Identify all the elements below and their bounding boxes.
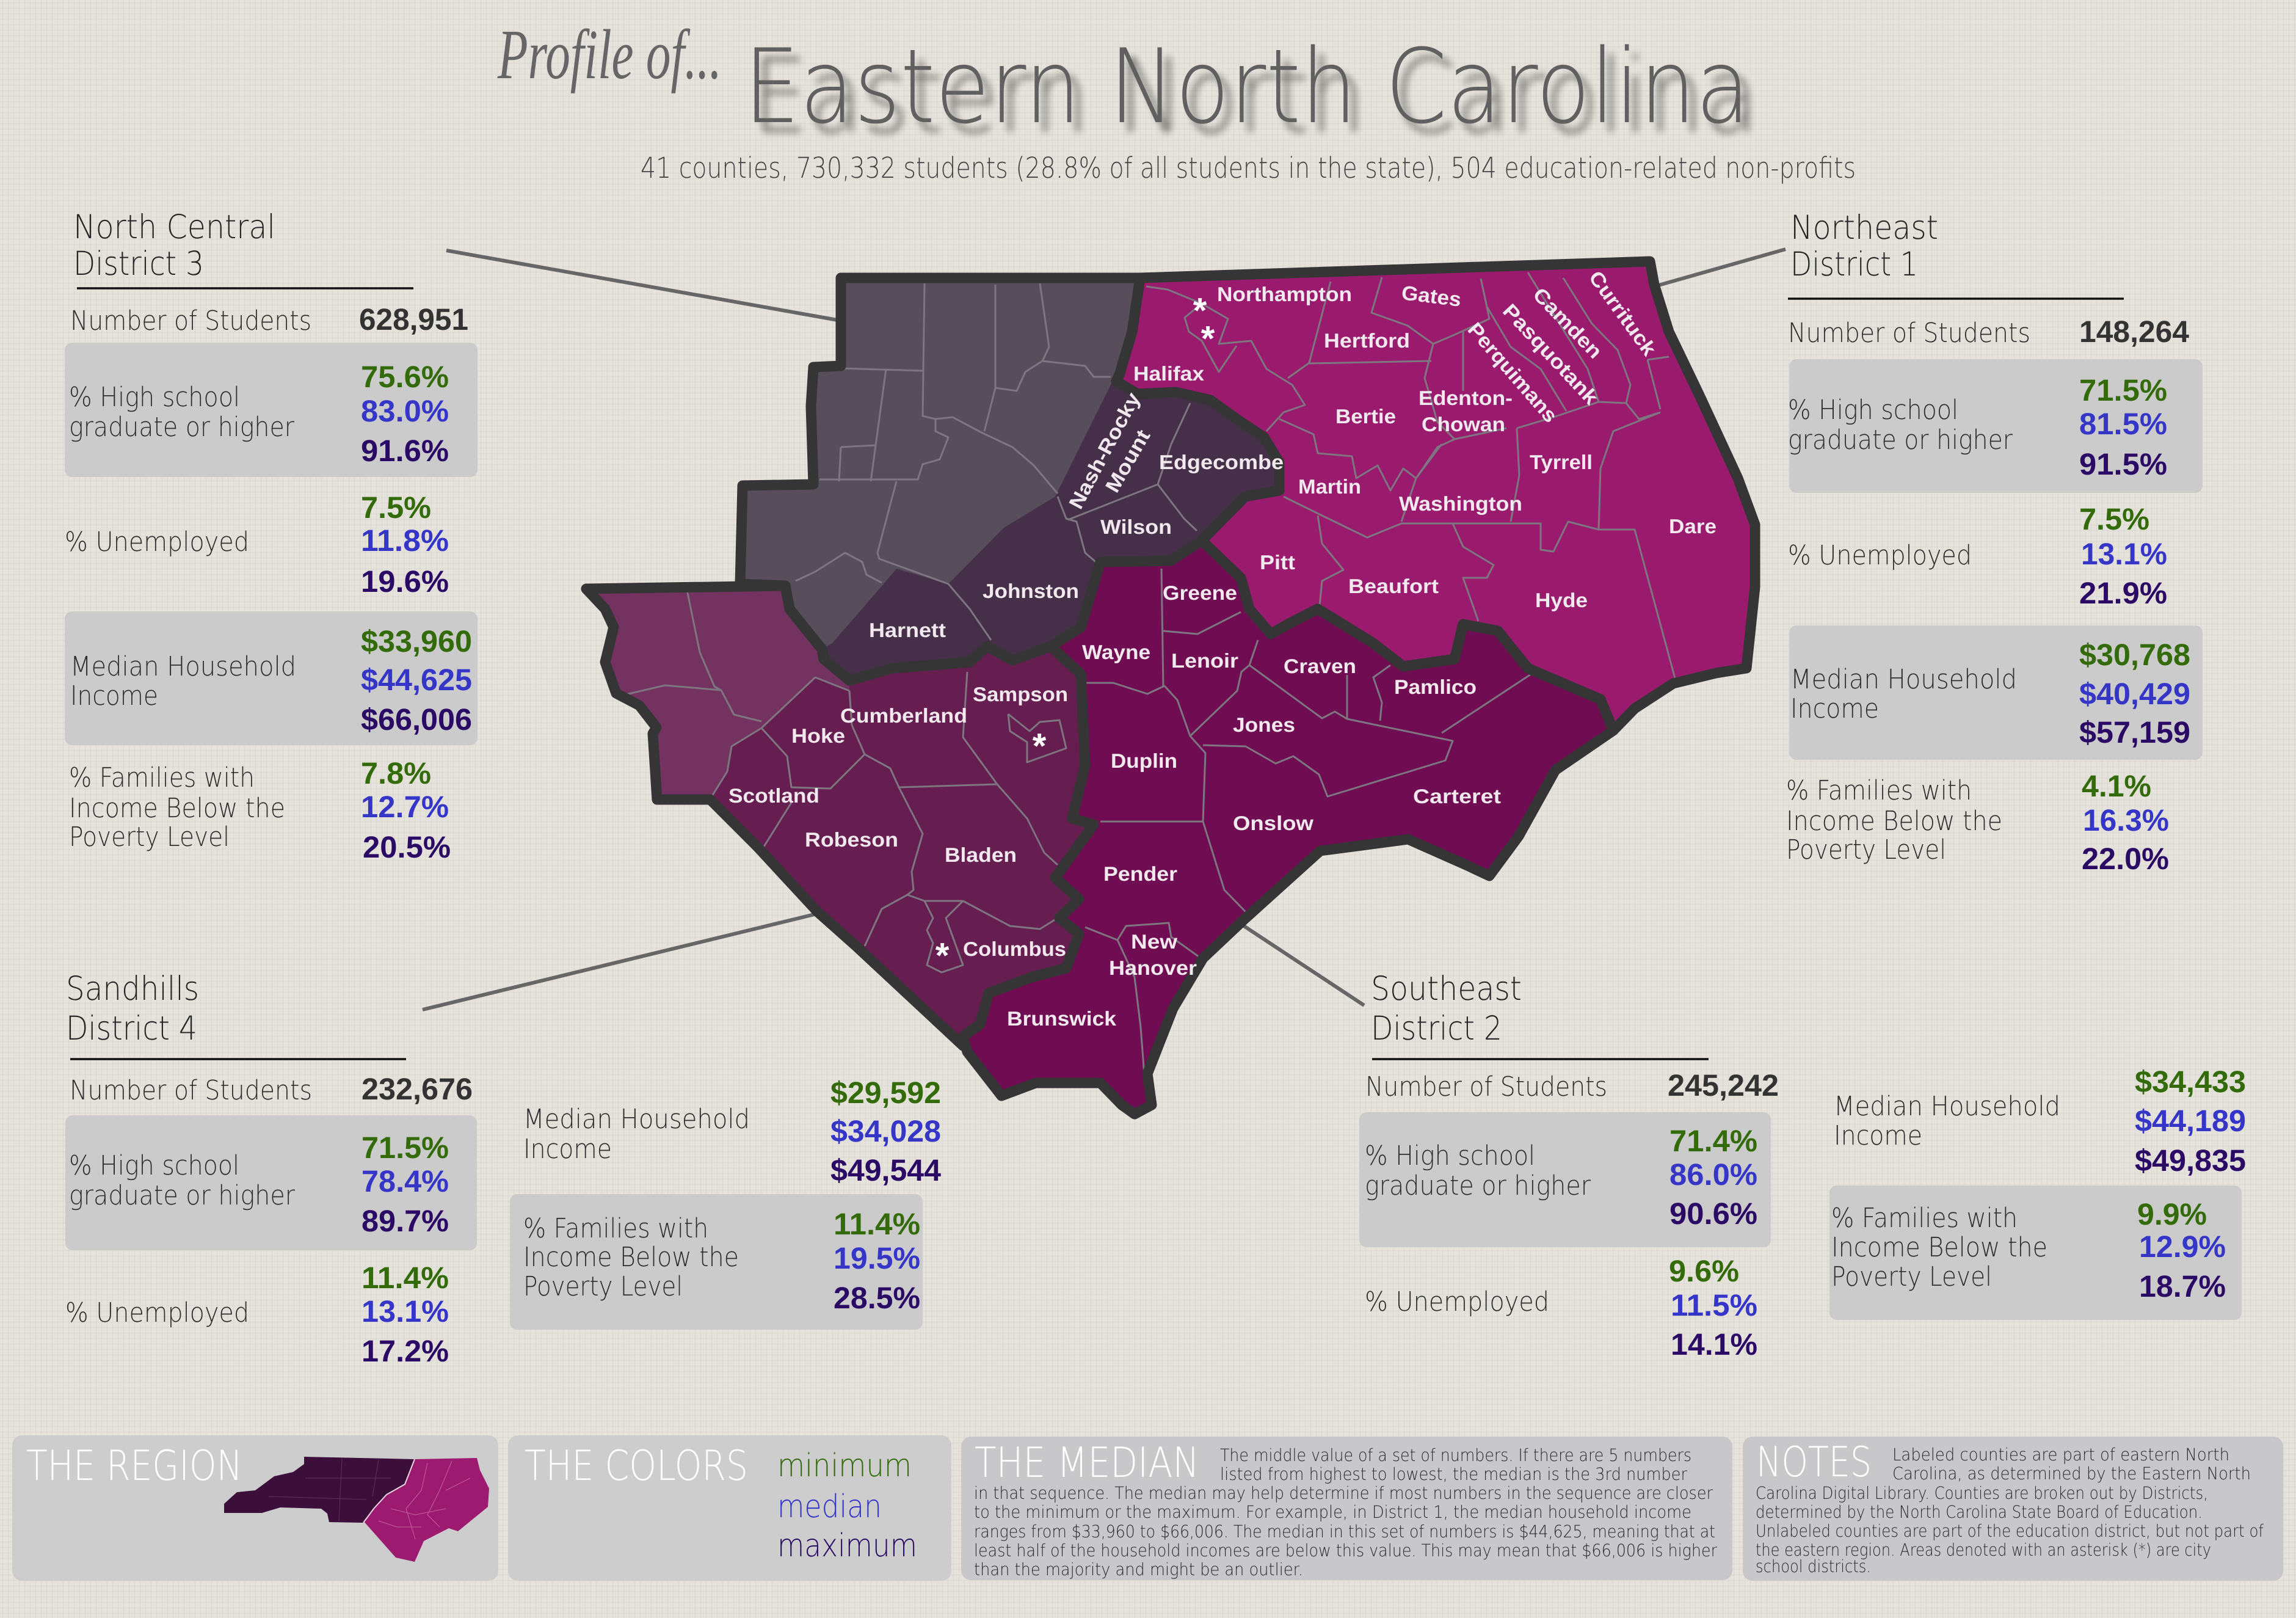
heading: Southeast	[1371, 969, 1522, 1008]
box: high school: % High school	[69, 382, 240, 413]
box: median household income: $33,960	[361, 624, 472, 658]
number of students: Number of Students	[70, 305, 311, 337]
median household income: Median Household	[1834, 1091, 2060, 1122]
county labels: Jones	[1233, 713, 1295, 736]
county labels: Craven	[1284, 655, 1356, 677]
heading: Northeast	[1790, 208, 1938, 247]
box: median household income: $66,006	[361, 702, 472, 737]
heading	[1371, 969, 1522, 1048]
heading: District 3	[73, 244, 204, 283]
unemployed: 7.5%	[2079, 502, 2149, 536]
county labels: Perquimans	[1463, 318, 1562, 427]
box: high school	[65, 1115, 477, 1250]
unemployed: 11.5%	[1671, 1288, 1757, 1322]
district 4 sandhills region	[586, 586, 1094, 1046]
median household income: $34,028	[830, 1114, 941, 1148]
families below poverty: 7.8%	[361, 756, 431, 790]
county labels: Bertie	[1335, 405, 1396, 428]
box: high school: % High school	[1788, 395, 1958, 426]
box: high school: 91.5%	[2079, 447, 2167, 481]
county labels: Nash-Rocky	[1064, 388, 1145, 512]
county labels: Pamlico	[1394, 676, 1477, 698]
county labels: Currituck	[1585, 266, 1661, 360]
unemployed: 11.8%	[361, 523, 449, 558]
notes text: school districts.	[1756, 1556, 1871, 1576]
number of students: 232,676	[361, 1072, 473, 1106]
number of students	[1788, 315, 2189, 349]
unemployed: 14.1%	[1671, 1327, 1757, 1361]
box: high school: 71.5%	[361, 1131, 449, 1165]
connector line: Sandhills	[423, 913, 819, 1010]
county labels: Pitt	[1260, 551, 1295, 574]
box: median household income: Income	[70, 680, 158, 712]
box: families below poverty: 12.9%	[2139, 1230, 2226, 1264]
district 3 north central region	[740, 278, 1279, 680]
box: high school: 91.6%	[361, 434, 449, 468]
county labels: Chowan	[1422, 413, 1505, 435]
median explanation text	[974, 1445, 1717, 1580]
unemployed: 17.2%	[361, 1334, 449, 1368]
asterisks: city school districts: *	[935, 936, 950, 975]
number of students	[1365, 1068, 1779, 1102]
box: high school: % High school	[69, 1150, 239, 1181]
box: high school: 83.0%	[361, 394, 449, 428]
panel: notes	[1743, 1437, 2283, 1581]
median household income: $49,544	[830, 1153, 941, 1187]
county labels: New	[1131, 930, 1177, 953]
notes text: Carolina, as determined by the Eastern North	[1892, 1463, 2251, 1484]
box: families below poverty: % Families with	[1831, 1203, 2018, 1234]
box: families below poverty: 18.7%	[2139, 1269, 2226, 1303]
median explanation text: ranges from $33,960 to $66,006. The median in this set of numbers is $44,625, meaning that at	[974, 1521, 1715, 1542]
heading	[73, 208, 275, 283]
county labels: Edgecombe	[1159, 451, 1284, 473]
box: families below poverty: Income Below the	[1831, 1232, 2047, 1263]
box: high school	[1788, 359, 2203, 493]
heading: notes: NOTES	[1756, 1438, 1872, 1487]
legend: minimum: minimum	[777, 1448, 912, 1484]
number of students: Number of Students	[1788, 318, 2030, 349]
county labels: Onslow	[1233, 812, 1313, 834]
panel: North Central District 3	[65, 208, 478, 864]
heading: the colors: THE COLORS	[525, 1442, 748, 1490]
number of students: 148,264	[2079, 315, 2189, 349]
unemployed: 11.4%	[361, 1261, 449, 1295]
box: families below poverty	[1829, 1186, 2242, 1320]
median explanation text: The middle value of a set of numbers. If there are 5 numbers	[1220, 1445, 1691, 1465]
families below poverty: 16.3%	[2083, 803, 2169, 837]
notes text: determined by the North Carolina State Board of Education.	[1756, 1502, 2203, 1522]
thick district outlines	[586, 261, 1755, 1114]
families below poverty	[69, 756, 451, 864]
median explanation text: least half of the household incomes are below this value. This may mean that $66,006 is higher	[974, 1540, 1717, 1561]
median household income: Median Household	[523, 1104, 750, 1135]
notes text: the eastern region. Areas denoted with an asterisk (*) are city	[1756, 1540, 2211, 1560]
median household income: $44,189	[2135, 1104, 2246, 1138]
county labels: Brunswick	[1007, 1007, 1117, 1030]
box: high school	[65, 343, 478, 477]
legend: maximum: maximum	[777, 1528, 917, 1564]
median explanation text: than the majority and might be an outlier.	[974, 1559, 1303, 1580]
box: families below poverty	[510, 1194, 923, 1330]
median household income	[1834, 1065, 2246, 1178]
box: high school: 81.5%	[2079, 407, 2167, 441]
families below poverty: % Families with	[69, 762, 255, 793]
families below poverty: 12.7%	[361, 790, 449, 824]
unemployed: % Unemployed	[65, 1297, 249, 1328]
box: high school: graduate or higher	[1365, 1170, 1591, 1201]
county labels: Tyrrell	[1530, 451, 1593, 473]
county labels: Hanover	[1109, 957, 1197, 979]
box: high school: 90.6%	[1669, 1197, 1757, 1231]
unemployed: 19.6%	[361, 564, 449, 599]
unemployed	[1788, 502, 2167, 610]
county labels: Dare	[1669, 515, 1717, 538]
families below poverty	[1786, 769, 2169, 876]
notes text: Labeled counties are part of eastern North	[1892, 1445, 2229, 1465]
county labels	[728, 266, 1717, 1030]
box: high school: graduate or higher	[69, 1180, 296, 1211]
median household income: $34,433	[2135, 1065, 2246, 1099]
median explanation text: to the minimum or the maximum. For example, in District 1, the median household income	[974, 1502, 1691, 1522]
connector line: Northeast	[1654, 249, 1786, 286]
county labels: Washington	[1399, 492, 1522, 515]
unemployed	[65, 1261, 449, 1368]
number of students	[70, 302, 468, 337]
unemployed	[1365, 1254, 1757, 1361]
box: families below poverty: Poverty Level	[1831, 1261, 1992, 1292]
unemployed	[65, 490, 449, 599]
title	[497, 16, 1856, 185]
county labels: Carteret	[1413, 785, 1501, 807]
county labels: Cumberland	[840, 704, 967, 727]
subtitle: 41 counties, 730,332 students (28.8% of all students in the state), 504 education-related non-profits	[641, 151, 1856, 185]
box: median household income: $30,768	[2079, 638, 2190, 672]
box: families below poverty: 19.5%	[834, 1241, 920, 1275]
box: families below poverty: 11.4%	[834, 1207, 920, 1241]
box: high school	[1359, 1112, 1771, 1247]
heading: the region: THE REGION	[26, 1442, 242, 1490]
asterisks: city school districts: *	[1201, 319, 1215, 359]
county labels: Hoke	[791, 724, 845, 747]
connector line: North Central	[446, 250, 841, 321]
unemployed: 9.6%	[1669, 1254, 1739, 1288]
county labels: Bladen	[945, 844, 1017, 866]
county labels: Northampton	[1217, 283, 1352, 305]
families below poverty: 4.1%	[2082, 769, 2151, 803]
asterisks: city school districts	[935, 291, 1215, 975]
box: median household income: Income	[1790, 693, 1879, 724]
unemployed: % Unemployed	[1365, 1286, 1549, 1317]
box: families below poverty: 28.5%	[834, 1281, 920, 1315]
box: high school: 71.5%	[2079, 373, 2167, 407]
box: high school: 71.4%	[1669, 1124, 1757, 1158]
box: median household income	[1789, 625, 2203, 760]
box: families below poverty: Income Below the	[523, 1242, 739, 1273]
median household income: Income	[1834, 1120, 1922, 1151]
families below poverty: 22.0%	[2082, 842, 2169, 876]
county labels: Duplin	[1111, 749, 1177, 772]
unemployed: 7.5%	[361, 490, 431, 525]
families below poverty: % Families with	[1786, 775, 1972, 806]
heading: North Central	[73, 208, 275, 246]
panel: the region	[12, 1435, 498, 1581]
box: high school: 75.6%	[361, 360, 449, 394]
number of students: Number of Students	[70, 1075, 312, 1106]
county labels: Gates	[1400, 281, 1462, 311]
median household income: $49,835	[2135, 1143, 2246, 1178]
box: median household income: Median Household	[1790, 664, 2017, 695]
number of students: Number of Students	[1365, 1071, 1607, 1102]
heading: District 2	[1371, 1009, 1502, 1048]
main heading: Eastern North Carolina	[744, 27, 1750, 147]
county labels: Hertford	[1324, 329, 1410, 352]
notes text	[1756, 1445, 2264, 1576]
median explanation text: listed from highest to lowest, the median is the 3rd number	[1220, 1464, 1687, 1484]
heading	[66, 969, 199, 1048]
box: median household income: $40,429	[2079, 677, 2190, 711]
box: high school: graduate or higher	[1788, 425, 2013, 456]
unemployed: 13.1%	[2081, 537, 2167, 571]
box: high school: 78.4%	[361, 1164, 449, 1198]
county labels: Halifax	[1133, 362, 1205, 385]
number of students: 628,951	[359, 302, 468, 337]
box: high school: % High school	[1365, 1140, 1535, 1172]
script heading: Profile of...: Profile of...	[497, 16, 722, 94]
county labels: Camden	[1528, 283, 1607, 363]
unemployed: 13.1%	[361, 1294, 449, 1328]
legend: median: median	[777, 1489, 882, 1525]
median household income	[523, 1076, 941, 1187]
unemployed: % Unemployed	[65, 527, 249, 558]
median household income: $29,592	[830, 1076, 941, 1110]
box: high school: 89.7%	[361, 1204, 449, 1238]
box: high school: graduate or higher	[69, 412, 295, 443]
box: families below poverty: 9.9%	[2137, 1197, 2207, 1231]
county labels: Johnston	[983, 580, 1079, 602]
connector line: Southeast	[1244, 926, 1364, 1005]
notes text: Carolina Digital Library. Counties are broken out by Districts,	[1756, 1483, 2208, 1503]
county labels: Columbus	[963, 938, 1066, 960]
county labels: Hyde	[1535, 589, 1588, 611]
box: families below poverty: % Families with	[523, 1213, 708, 1244]
median explanation text: in that sequence. The median may help determine if most numbers in the sequence are closer	[974, 1483, 1713, 1503]
families below poverty: Income Below the	[69, 793, 285, 824]
county labels: Wayne	[1082, 641, 1150, 663]
county labels: Robeson	[805, 828, 898, 851]
county labels: Pender	[1103, 862, 1177, 885]
county labels: Greene	[1163, 581, 1237, 604]
county labels: Lenoir	[1171, 649, 1238, 672]
panel: Northeast District 1	[1786, 208, 2203, 876]
heading	[1790, 208, 1938, 283]
heading: Sandhills	[66, 969, 199, 1008]
asterisks: city school districts: *	[1033, 726, 1047, 766]
heading: District 4	[66, 1009, 197, 1048]
county labels: Scotland	[728, 784, 819, 807]
families below poverty: Poverty Level	[1786, 834, 1946, 865]
unemployed: % Unemployed	[1788, 540, 1972, 571]
county labels: Harnett	[869, 619, 946, 641]
district 1 northeast region	[1116, 261, 1755, 731]
county labels: Martin	[1298, 475, 1361, 498]
county labels: Pasquotank	[1499, 299, 1603, 409]
number of students	[70, 1072, 473, 1106]
box: median household income: $44,625	[361, 663, 472, 697]
locator map: state of North Carolina	[224, 1457, 489, 1562]
panel: the colors	[508, 1435, 951, 1581]
asterisks: city school districts: *	[1193, 291, 1207, 330]
panel: Sandhills District 4	[65, 969, 941, 1368]
county labels: Edenton-	[1419, 387, 1513, 409]
unemployed: 21.9%	[2079, 576, 2167, 610]
heading: District 1	[1790, 245, 1918, 283]
district 2 southeast region	[963, 541, 1613, 1114]
box: high school: 86.0%	[1669, 1157, 1757, 1192]
county labels: Wilson	[1100, 516, 1172, 538]
heading: the median: THE MEDIAN	[975, 1439, 1199, 1487]
box: median household income: $57,159	[2079, 715, 2190, 749]
families below poverty: Poverty Level	[69, 822, 230, 853]
families below poverty: 20.5%	[363, 830, 451, 864]
box: families below poverty: Poverty Level	[523, 1271, 683, 1302]
number of students: 245,242	[1668, 1068, 1779, 1102]
median household income: Income	[523, 1134, 612, 1165]
box: median household income: Median Household	[70, 651, 296, 682]
families below poverty: Income Below the	[1786, 806, 2002, 837]
map of eastern North Carolina	[586, 261, 1755, 1114]
county labels: Beaufort	[1348, 575, 1439, 597]
box: median household income	[65, 611, 478, 745]
county labels: Sampson	[973, 683, 1068, 705]
panel: Southeast District 2	[1359, 969, 2246, 1361]
county labels: Mount	[1101, 426, 1155, 496]
panel: the median	[961, 1437, 1732, 1580]
